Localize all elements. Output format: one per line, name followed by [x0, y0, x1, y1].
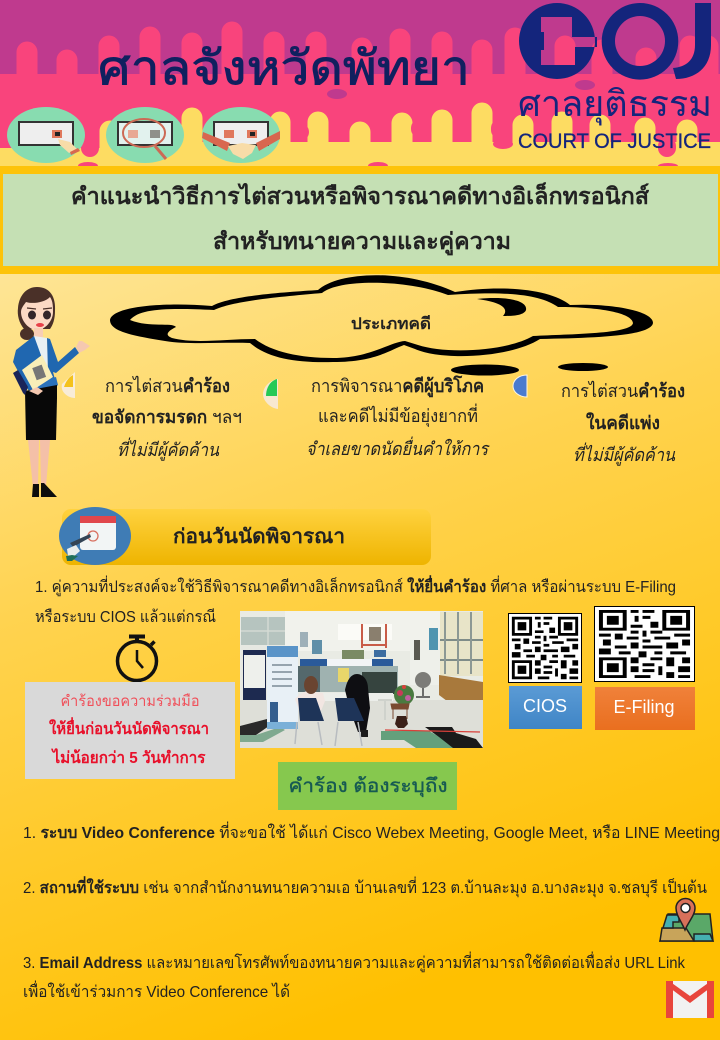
header banner [0, 0, 720, 170]
cloud: case types [110, 275, 653, 376]
text block: civil petitions: ที่ไม่มีผู้คัดค้าน [573, 442, 676, 466]
text block: consumer cases: จำเลยขาดนัดยื่นคำให้การ [306, 436, 490, 459]
callout: deadline: ให้ยื่นก่อนวันนัดพิจารณา [49, 717, 209, 738]
text block: probate petitions [92, 375, 242, 461]
icon: tablet with handshake [202, 107, 280, 163]
jacket [13, 336, 79, 393]
callout: deadline: ไม่น้อยกว่า 5 วันทำการ [51, 748, 206, 767]
text block: step 1: หรือระบบ CIOS แล้วแต่กรณี [35, 608, 216, 626]
button: CIOS: CIOS [523, 696, 567, 716]
label: petition must specify [278, 762, 457, 810]
icon: tablet with magnifier [106, 107, 184, 163]
section title: ก่อนวันนัดพิจารณา [173, 526, 345, 548]
text block: civil petitions [561, 380, 685, 466]
folder [22, 355, 53, 390]
text block: probate petitions: ขอจัดการมรดก ฯลฯ [92, 407, 242, 427]
skirt [25, 385, 57, 440]
label: petition must specify: คำร้อง ต้องระบุถึง [288, 776, 448, 798]
text block: step 1 [35, 575, 676, 626]
text block: probate petitions: ที่ไม่มีผู้คัดค้าน [117, 437, 220, 461]
logo text: Thai: ศาลยุติธรรม [518, 83, 712, 126]
text block: consumer cases: การพิจารณาคดีผู้บริโภค [311, 375, 484, 398]
QR code: CIOS [508, 613, 582, 683]
cloud label: ประเภทคดี [351, 314, 431, 333]
callout: deadline: คำร้องขอความร่วมมือ [60, 693, 200, 710]
QR code: E-Filing [594, 606, 695, 682]
panel: main heading [0, 166, 720, 274]
text block: probate petitions: การไต่สวนคำร้อง [105, 375, 230, 396]
list item 3: เพื่อใช้เข้าร่วมการ Video Conference ได้ [23, 980, 290, 1001]
text block: civil petitions: ในคดีแพ่ง [586, 412, 660, 433]
logo text: English: COURT OF JUSTICE [518, 130, 711, 153]
callout: deadline [25, 682, 235, 779]
book [13, 370, 28, 395]
icon: gmail [666, 981, 714, 1018]
text block: civil petitions: การไต่สวนคำร้อง [561, 380, 685, 401]
list item 3: 3. Email Address และหมายเลขโทรศัพท์ของทนายความและคู่ความที่สามารถใช้ติดต่อเพื่อส่ง URL Link [23, 951, 686, 973]
icon: stopwatch [118, 636, 156, 680]
flowers [394, 685, 414, 705]
logo: COJ mark [519, 3, 711, 80]
standee [267, 646, 298, 729]
text block: step 1: 1. คู่ความที่ประสงค์จะใช้วิธีพิจารณาคดีทางอิเล็กทรอนิกส์ ให้ยื่นคำร้อง ที่ศาล หรือผ่านระบบ E-Filing [35, 575, 676, 597]
list item 1: 1. ระบบ Video Conference ที่จะขอใช้ ได้แก่ Cisco Webex Meeting, Google Meet, หรือ LINE Meeting [23, 821, 720, 842]
heading line 1: คำแนะนำวิธีการไต่สวนหรือพิจารณาคดีทางอิเล็กทรอนิกส์ [71, 181, 650, 209]
illustration: lawyer woman [13, 287, 90, 497]
icon: calendar [59, 507, 131, 565]
heading line 2: สำหรับทนายความและคู่ความ [213, 228, 511, 256]
icon: small blue segment [513, 375, 527, 397]
decorative blobs [327, 89, 347, 99]
photo: one stop service counter [240, 611, 483, 748]
icon: map pin [660, 898, 713, 941]
title: court name: ศาลจังหวัดพัทยา [98, 41, 470, 94]
section header: before hearing day [59, 507, 431, 565]
icon: small green segment [263, 379, 278, 409]
text block: consumer cases [306, 375, 490, 459]
list item 3 [23, 951, 686, 1001]
fan [415, 672, 431, 688]
button: E-Filing [595, 687, 695, 730]
button: CIOS [509, 686, 582, 729]
text block: consumer cases: และคดีไม่มีข้อยุ่งยากที่ [318, 403, 478, 427]
icon: small yellow segment [62, 372, 75, 398]
hand [76, 341, 90, 353]
legs [28, 440, 50, 487]
desk and people [322, 693, 393, 701]
icon: tablet with hand [7, 107, 85, 163]
button: E-Filing: E-Filing [613, 697, 675, 717]
